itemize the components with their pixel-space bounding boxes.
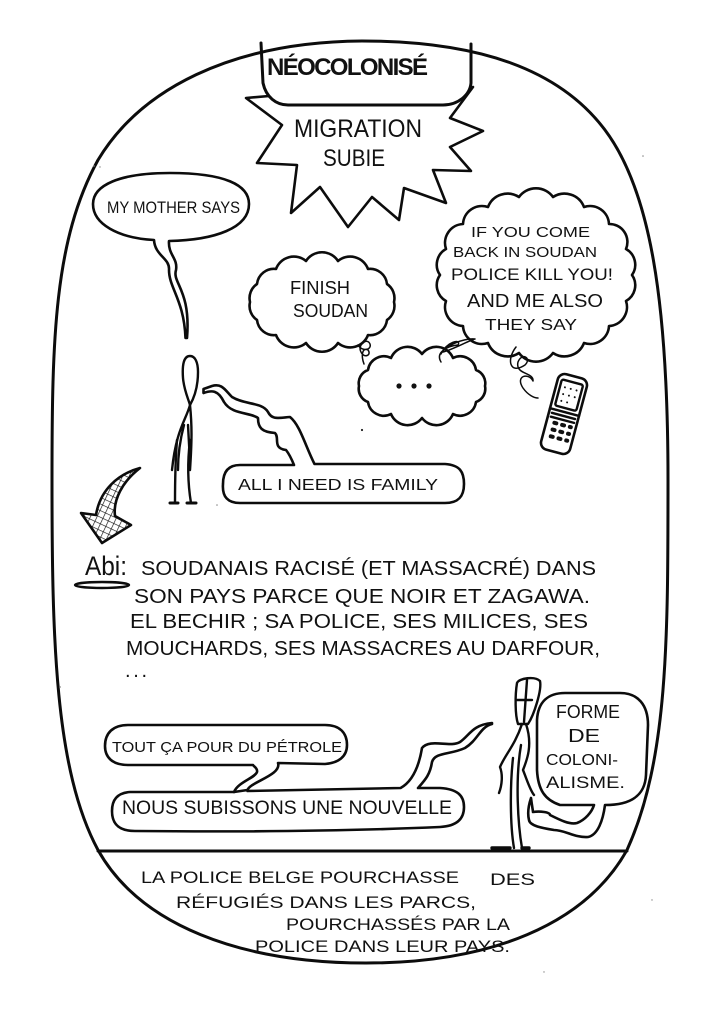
cloud bubble: finish soudan: SOUDAN [293, 301, 368, 321]
text block: Abi narration: EL BECHIR ; SA POLICE, SES MILICES, SES [130, 611, 588, 633]
figure: second person [492, 678, 540, 848]
text block: Abi narration [125, 557, 600, 682]
caption: DES [490, 870, 535, 889]
speech bubble: forme de colonialisme [528, 693, 648, 837]
curly tails between clouds [358, 339, 538, 398]
icon: mobile phone [539, 372, 589, 456]
starburst text: MIGRATION [294, 115, 422, 143]
caption: LA POLICE BELGE POURCHASSE [141, 868, 459, 887]
caption [141, 868, 535, 956]
figure: first person [170, 356, 198, 503]
paper specks [59, 155, 653, 973]
cloud bubble: if you come back: AND ME ALSO [467, 291, 603, 311]
speech bubble: forme de colonialisme: ALISME. [546, 773, 625, 792]
cloud bubble: if you come back: POLICE KILL YOU! [451, 265, 613, 284]
text block: Abi narration: SON PAYS PARCE QUE NOIR ET ZAGAWA. [134, 586, 590, 608]
starburst text: SUBIE [323, 145, 385, 172]
speech bubble: all I need is family [204, 385, 464, 503]
caption: POLICE DANS LEUR PAYS. [255, 937, 510, 956]
cloud bubble: if you come back: BACK IN SOUDAN [453, 244, 597, 261]
starburst: migration subie [246, 87, 483, 227]
cloud bubble: if you come back: THEY SAY [485, 317, 577, 334]
speech bubble: all I need is family: ALL I NEED IS FAMILY [238, 477, 438, 494]
cloud bubble: finish soudan [250, 252, 394, 352]
title: NÉOCOLONISÉ [267, 53, 428, 81]
speech bubble: forme de colonialisme: COLONI- [546, 752, 618, 769]
cloud bubble: ellipsis [359, 347, 485, 425]
speech bubble: my mother says: MY MOTHER SAYS [107, 198, 240, 217]
speech bubble: nous subissons une nouvelle [112, 723, 492, 831]
text block: Abi narration: SOUDANAIS RACISÉ (ET MASSACRÉ) DANS [141, 557, 596, 580]
page frame [52, 41, 668, 963]
caption: POURCHASSÉS PAR LA [286, 915, 511, 934]
cloud bubble: if you come back [437, 188, 635, 362]
speech bubble: tout ça pour du pétrole [105, 725, 347, 792]
arrow: curved mesh arrow [81, 468, 140, 543]
starburst text [294, 115, 422, 172]
divider line above caption [98, 850, 627, 852]
caption: RÉFUGIÉS DANS LES PARCS, [176, 893, 476, 912]
text block: Abi narration: ... [125, 660, 147, 682]
title box [261, 43, 471, 105]
speech bubble: tout ça pour du pétrole: TOUT ÇA POUR DU PÉTROLE [112, 739, 342, 756]
speech bubble: forme de colonialisme: FORME [556, 702, 620, 722]
cloud bubble: if you come back: IF YOU COME [471, 224, 590, 241]
label: Abi: Abi: [85, 551, 127, 581]
speech bubble: nous subissons une nouvelle: NOUS SUBISSONS UNE NOUVELLE [122, 798, 452, 819]
label: Abi [75, 551, 129, 588]
speech bubble: my mother says [93, 173, 249, 338]
cloud bubble: finish soudan: FINISH [290, 278, 350, 298]
speech bubble: forme de colonialisme: DE [568, 726, 600, 746]
text block: Abi narration: MOUCHARDS, SES MASSACRES AU DARFOUR, [126, 638, 600, 660]
